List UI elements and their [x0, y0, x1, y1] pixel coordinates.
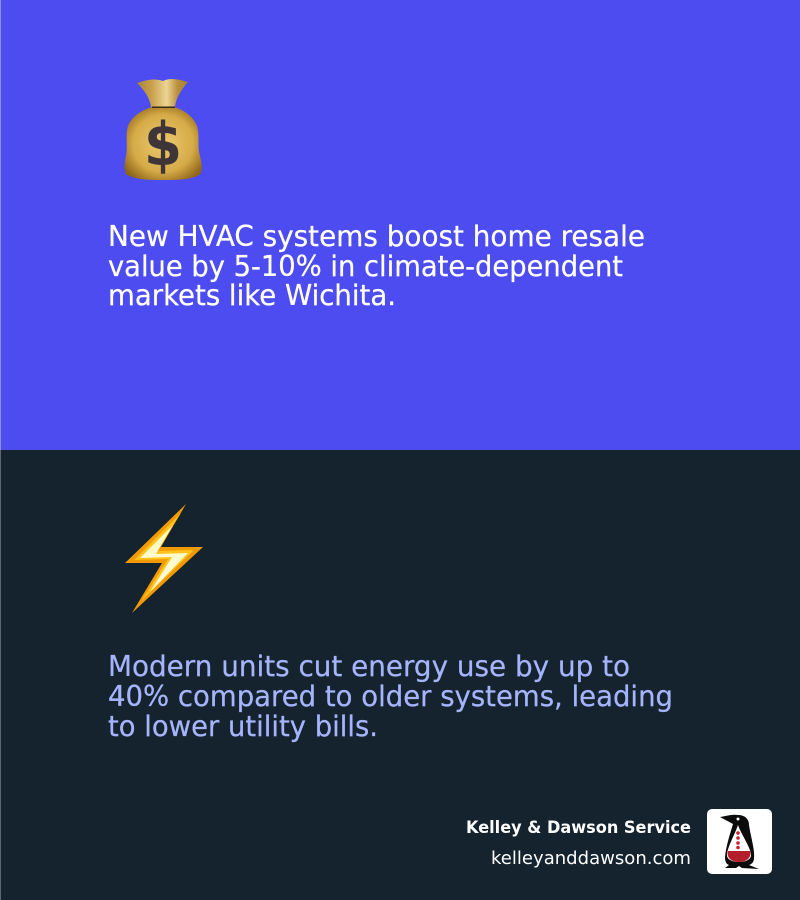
text: resale value statement: markets like Wichita. — [108, 279, 396, 312]
icon: money bag — [125, 79, 202, 180]
icon: penguin logo — [707, 809, 772, 874]
text: company name: Kelley & Dawson Service — [466, 818, 691, 837]
text: energy savings statement: 40% compared to older systems, leading — [108, 680, 673, 713]
text: resale value statement: New HVAC systems boost home resale — [108, 220, 645, 253]
text: website: kelleyanddawson.com — [491, 849, 691, 869]
text: energy savings statement: Modern units cut energy use by up to — [108, 650, 630, 683]
text: energy savings statement: to lower utility bills. — [108, 710, 378, 743]
text: resale value statement — [108, 220, 645, 312]
footer: brand — [466, 809, 772, 874]
icon: money bag: $ — [144, 110, 182, 180]
panel: energy savings — [0, 450, 800, 900]
text: energy savings statement — [108, 650, 673, 743]
text: resale value statement: value by 5-10% in climate-dependent — [108, 250, 623, 283]
icon: lightning bolt — [125, 504, 203, 613]
panel: resale value — [0, 0, 800, 450]
